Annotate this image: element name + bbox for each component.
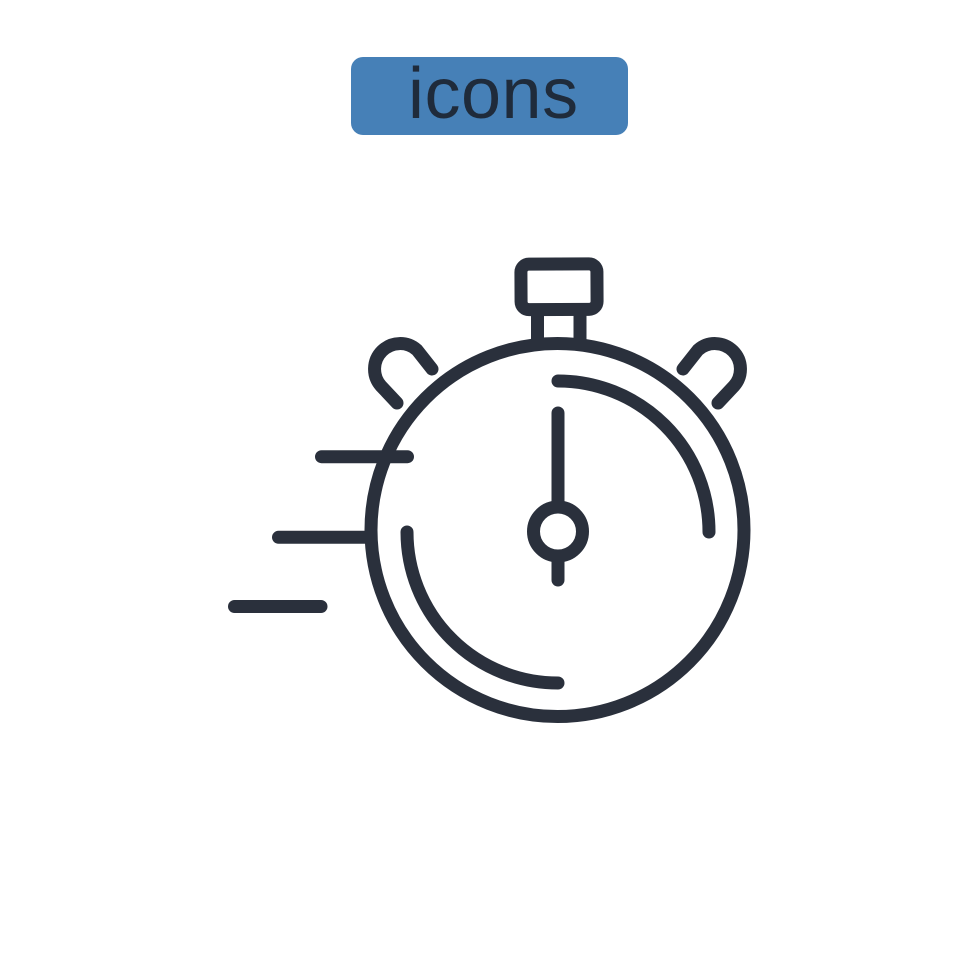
- inner highlight arc right: [558, 381, 709, 532]
- speed lines: [234, 457, 408, 606]
- left side button: [375, 344, 432, 403]
- hand pivot: [534, 507, 582, 556]
- title badge: icons: [408, 54, 579, 134]
- right side button: [683, 344, 740, 403]
- clock hand: [552, 413, 564, 580]
- title badge: [351, 57, 628, 135]
- inner highlight arc left: [407, 532, 558, 683]
- crown stem: [538, 312, 580, 340]
- watch body: [371, 344, 744, 716]
- crown button: [521, 264, 597, 310]
